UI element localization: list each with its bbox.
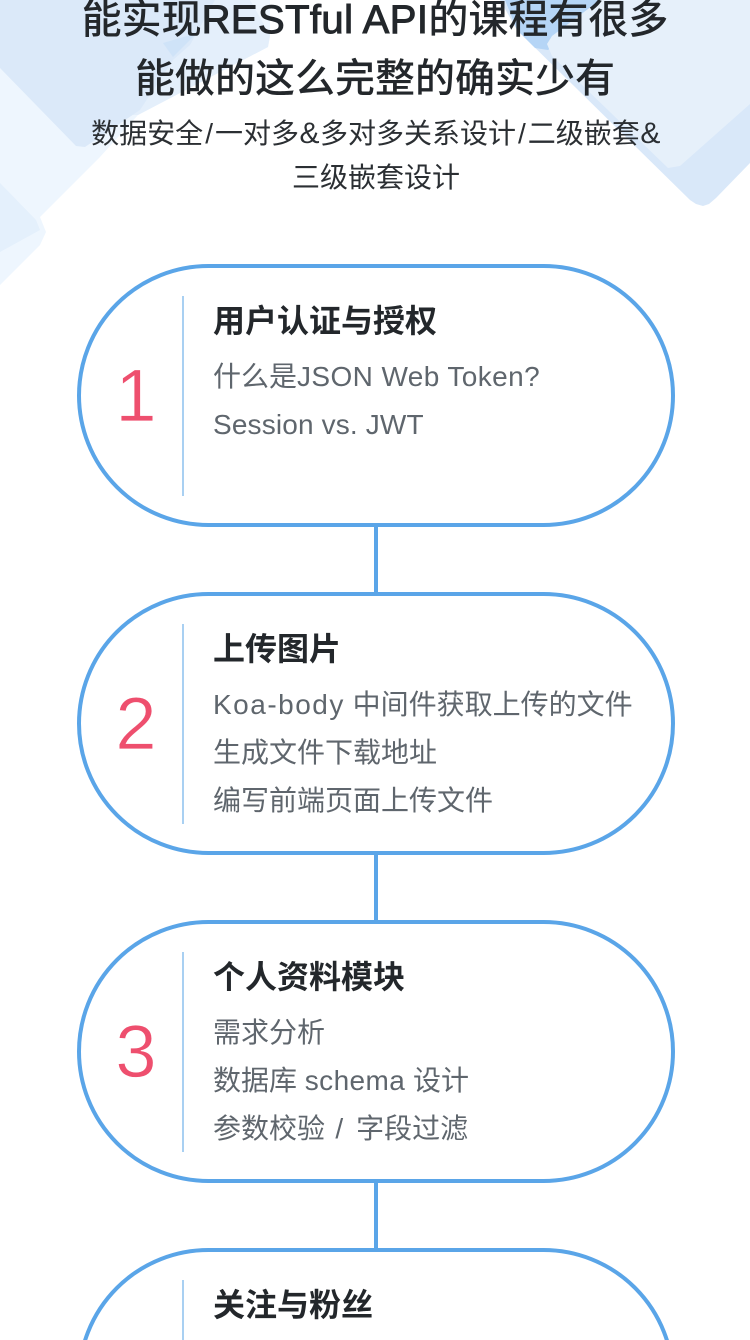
subtitle: 数据安全/一对多&多对多关系设计/二级嵌套& xyxy=(91,117,660,150)
panel: step 3: 3 xyxy=(115,1010,157,1093)
text: step 3 item 2: 数据库 schema 设计 xyxy=(213,1065,469,1096)
connector 1 xyxy=(374,527,378,593)
heading: step 3: 个人资料模块 xyxy=(213,959,405,995)
heading: step 2: 上传图片 xyxy=(213,631,341,667)
panel: step 2 xyxy=(77,592,675,855)
panel: step 2: 2 xyxy=(115,682,157,765)
text: step 2 item 1: Koa-body 中间件获取上传的文件 xyxy=(213,689,633,720)
panel: step 1 xyxy=(77,264,675,527)
heading: step 4: 关注与粉丝 xyxy=(213,1287,373,1323)
text: step 3 item 3: 参数校验 / 字段过滤 xyxy=(213,1113,468,1144)
background: geometric shapes xyxy=(0,0,750,285)
text: step 1 item 2: Session vs. JWT xyxy=(213,409,424,440)
panel: step 4 xyxy=(77,1248,675,1340)
heading: step 1: 用户认证与授权 xyxy=(213,303,437,339)
text: step 3 item 1: 需求分析 xyxy=(213,1017,325,1048)
panel: step 1: 1 xyxy=(115,354,157,437)
connector 2 xyxy=(374,855,378,921)
text: step 1 item 1: 什么是JSON Web Token? xyxy=(213,361,540,392)
title line 2: 能做的这么完整的确实少有 xyxy=(135,57,615,101)
subtitle line 2: 三级嵌套设计 xyxy=(292,162,460,193)
connector 3 xyxy=(374,1183,378,1249)
panel: step 3 xyxy=(77,920,675,1183)
text: step 2 item 3: 编写前端页面上传文件 xyxy=(213,785,493,816)
text: step 2 item 2: 生成文件下载地址 xyxy=(213,737,437,768)
